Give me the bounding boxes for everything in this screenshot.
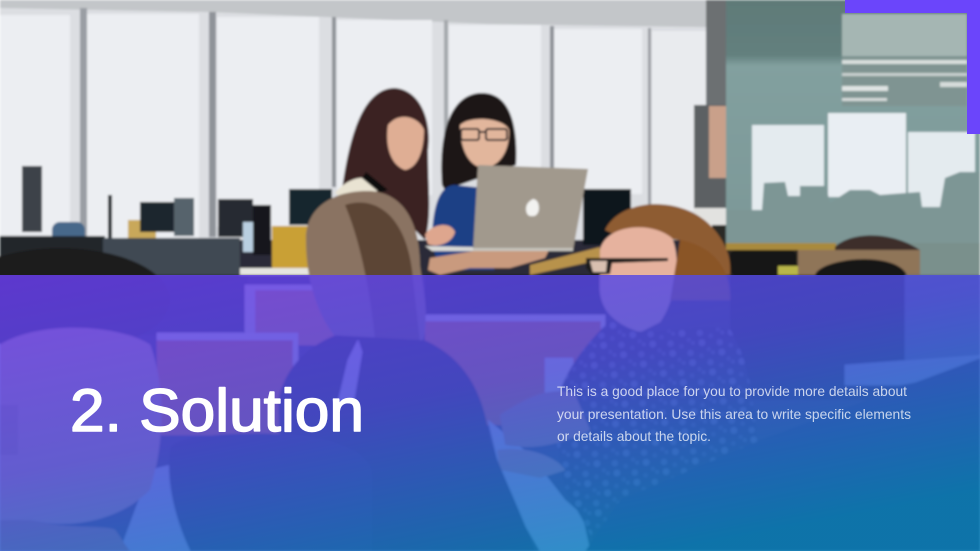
body text block: This is a good place for you to provide more details about (557, 383, 907, 399)
laptop (425, 165, 588, 251)
windows and blinds (0, 0, 710, 240)
woman in white top (335, 88, 429, 240)
woman from behind with long hair (278, 191, 535, 551)
icon: apple logo (526, 199, 539, 216)
glass wall (726, 0, 980, 275)
heading: 2. Solution: 2. Solution (70, 377, 364, 444)
man in foreground (0, 248, 170, 551)
background desks and monitors (0, 0, 732, 275)
accent corner bracket (845, 0, 980, 134)
woman in blue top (425, 93, 550, 275)
dark floor foreground (585, 358, 980, 551)
body text block: your presentation. Use this area to write specific elements (557, 406, 911, 422)
gradient overlay band (0, 275, 980, 551)
partitions and lower office (120, 275, 980, 551)
body text block (557, 383, 911, 444)
body text block: or details about the topic. (557, 428, 711, 444)
office chair (169, 433, 372, 551)
woman with glasses (497, 204, 760, 551)
